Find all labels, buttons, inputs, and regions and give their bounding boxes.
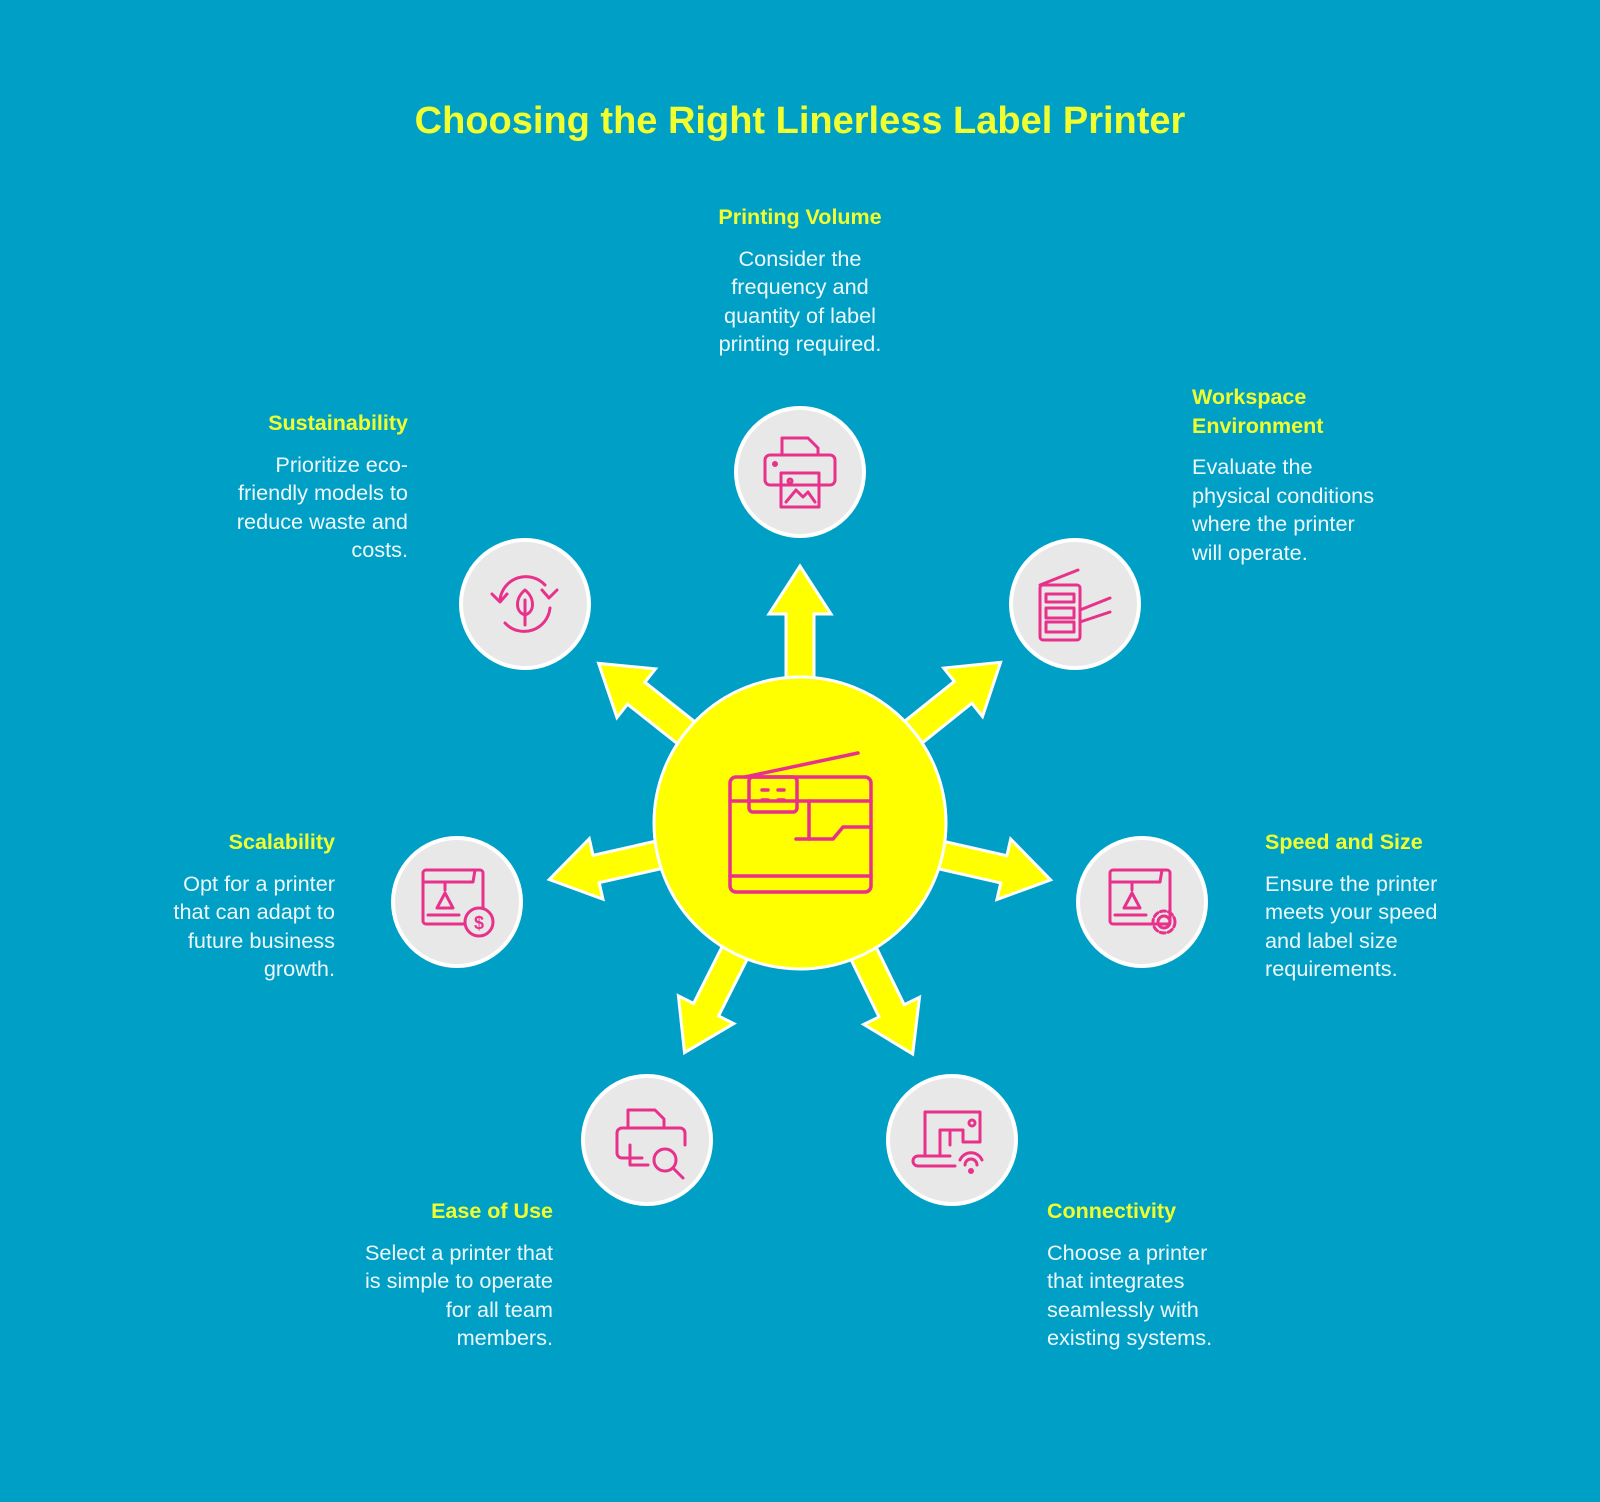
node icons — [423, 438, 1175, 1178]
text: connectivity: existing systems. — [1047, 1325, 1212, 1350]
text: ease of use: members. — [457, 1325, 553, 1350]
text: scalability: Scalability — [229, 830, 335, 854]
arrow: upper right — [781, 638, 1020, 847]
text: ease of use: Select a printer that — [365, 1240, 553, 1264]
text: speed and size: meets your speed — [1265, 899, 1437, 924]
arrow: left — [542, 793, 807, 910]
arrows — [542, 566, 1057, 1068]
text: sustainability — [237, 411, 408, 562]
text: sustainability: reduce waste and — [237, 508, 408, 534]
text: connectivity: seamlessly with — [1047, 1296, 1199, 1322]
arrow: upper left — [579, 639, 819, 847]
text: sustainability: friendly models to — [238, 480, 408, 505]
text: printing volume: Printing Volume — [718, 205, 882, 229]
text: speed and size: requirements. — [1265, 956, 1398, 981]
arrow: up — [769, 566, 831, 823]
icon: scalability — [423, 870, 493, 936]
icon: scalability: $ — [474, 913, 484, 933]
text: sustainability: Prioritize eco- — [275, 452, 408, 476]
icon: speed and size — [1110, 870, 1175, 933]
text: printing volume: quantity of label — [724, 302, 876, 328]
text: workspace environment — [1192, 385, 1374, 564]
center hub — [654, 677, 946, 969]
icon: printer with image — [765, 438, 835, 507]
text: connectivity: Connectivity — [1047, 1199, 1176, 1223]
text: speed and size: and label size — [1265, 928, 1398, 952]
node circles — [393, 408, 1206, 1204]
arrow: right — [793, 793, 1057, 910]
icon: sewing/connectivity — [913, 1112, 982, 1172]
text: workspace environment: Environment — [1192, 414, 1323, 438]
text: sustainability: Sustainability — [268, 411, 408, 435]
text: workspace environment: where the printer — [1192, 511, 1355, 536]
title: Choosing the Right Linerless Label Printer — [415, 100, 1185, 142]
text: workspace environment: Evaluate the — [1192, 454, 1313, 479]
text: workspace environment: physical conditions — [1192, 482, 1374, 508]
text: printing volume: frequency and — [731, 274, 869, 299]
arrow: lower left — [657, 809, 828, 1067]
text: printing volume: Consider the — [739, 246, 861, 270]
text: scalability: future business — [188, 928, 335, 952]
icon: sustainability — [492, 577, 557, 631]
text: connectivity: Choose a printer — [1047, 1240, 1207, 1264]
icon: copier — [730, 753, 871, 892]
text: connectivity: that integrates — [1047, 1268, 1184, 1293]
text: sustainability: costs. — [351, 537, 408, 562]
text: speed and size: Speed and Size — [1265, 830, 1423, 854]
text: printing volume: printing required. — [719, 331, 881, 356]
text: ease of use — [365, 1199, 553, 1350]
text: ease of use: Ease of Use — [431, 1199, 553, 1223]
text: scalability — [173, 830, 335, 981]
text: scalability: that can adapt to — [173, 899, 335, 924]
text: workspace environment: will operate. — [1192, 540, 1308, 564]
text: scalability: growth. — [264, 956, 335, 981]
text: ease of use: is simple to operate — [365, 1268, 553, 1293]
icon: copier workspace — [1040, 570, 1110, 640]
arrow: lower right — [772, 809, 941, 1068]
icon: printer with magnifier — [617, 1110, 685, 1178]
text: ease of use: for all team — [446, 1296, 553, 1322]
text: workspace environment: Workspace — [1192, 385, 1306, 409]
text: connectivity — [1047, 1199, 1212, 1350]
text: printing volume — [718, 205, 882, 356]
text: scalability: Opt for a printer — [183, 870, 335, 896]
text: speed and size — [1265, 830, 1437, 981]
text: speed and size: Ensure the printer — [1265, 870, 1437, 896]
